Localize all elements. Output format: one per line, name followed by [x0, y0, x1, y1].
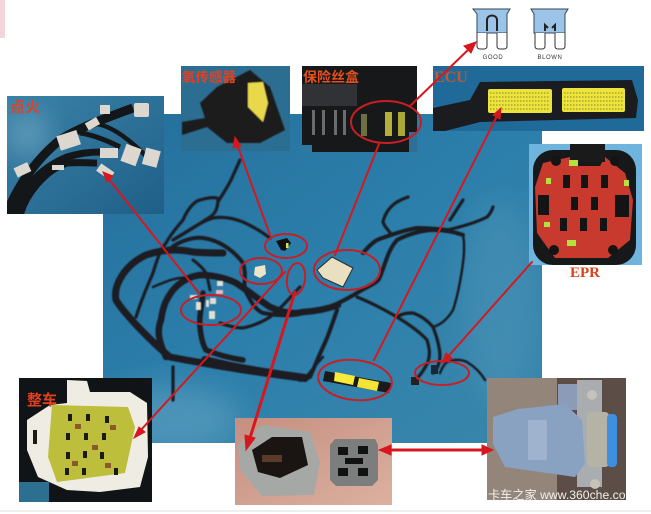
panel: fuse box photo [302, 66, 417, 152]
red callout circles [181, 101, 469, 404]
label: 点火 [10, 98, 40, 116]
arrow: grey connector [245, 292, 295, 450]
watermark: 卡车之家 www.360che.co [488, 487, 626, 502]
arrow: fuse box [335, 144, 379, 255]
arrow: fuse diagram [410, 42, 476, 106]
red arrows [103, 42, 532, 455]
caption: BLOWN [537, 55, 563, 61]
caption: GOOD [483, 55, 503, 61]
connector: EPR [431, 365, 438, 374]
icon: good fuse [473, 9, 510, 61]
bottom edge strip [0, 510, 651, 512]
icon: blown fuse [531, 9, 568, 61]
arrow: whole vehicle [134, 272, 285, 438]
panel: ECU photo [433, 66, 644, 131]
arrow: ECU [374, 108, 501, 360]
connector: loose end [411, 377, 419, 385]
panel: ignition photo [6, 96, 164, 216]
label: EPR: EPR [570, 265, 600, 281]
connector: oxygen sensor [276, 238, 291, 251]
connector: fuse box [317, 257, 353, 287]
arrow: double-headed link [379, 445, 493, 455]
main photo: wiring harness on blue cloth [100, 114, 542, 455]
arrow: oxygen sensor [233, 137, 270, 235]
corner mark [0, 0, 5, 38]
panel: whole-vehicle connector photo [19, 378, 152, 502]
harness wires [116, 160, 493, 400]
label: 整车 [27, 391, 57, 409]
panel: EPR photo [529, 144, 642, 265]
label: 氧传感器 [182, 69, 236, 85]
label: ECU [434, 69, 468, 86]
connector: ECU [323, 371, 391, 393]
connector: small white [254, 265, 266, 278]
arrow: ignition [103, 172, 199, 293]
connector: ignition cluster [190, 281, 223, 319]
label: 保险丝盒 [303, 69, 359, 85]
panel: oxygen sensor photo [181, 66, 290, 151]
arrow: EPR [442, 262, 532, 363]
panel: D-sub connector photo [487, 378, 626, 502]
panel: hand holding connector photo [235, 418, 392, 505]
